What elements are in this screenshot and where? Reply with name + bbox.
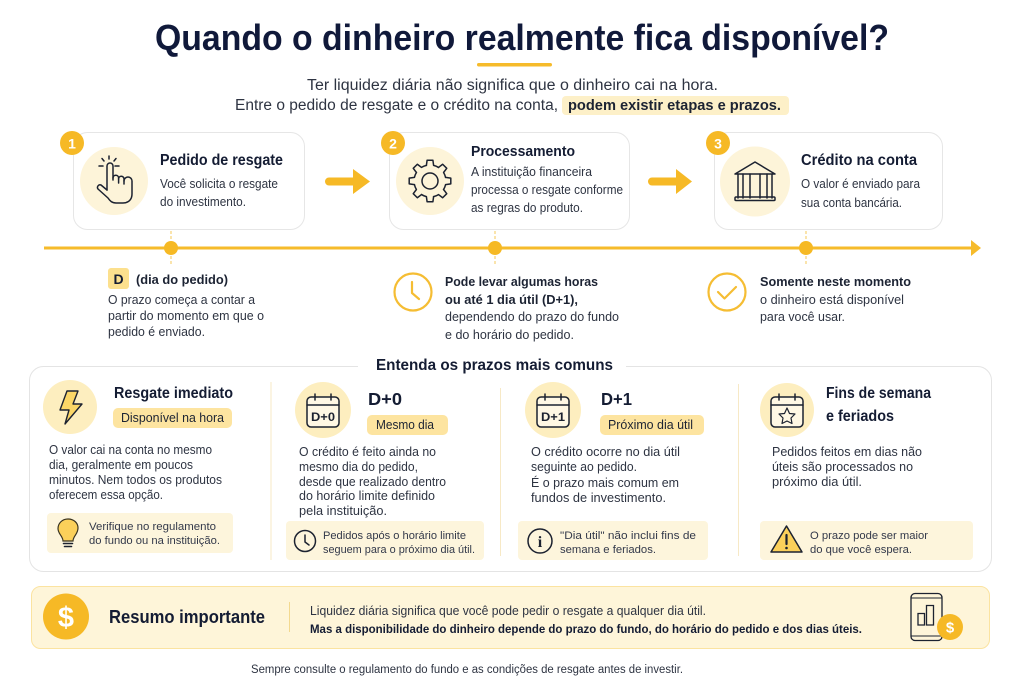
panel: resumo importante xyxy=(32,586,990,648)
text block: somente neste momento: Somente neste momento xyxy=(760,275,911,289)
column: D+1 xyxy=(518,382,708,560)
text block: pode levar algumas horas xyxy=(445,275,619,342)
text block: D dia do pedido: O prazo começa a contar a xyxy=(108,293,255,307)
icon: lightning xyxy=(60,391,82,424)
column: D+0: seguem para o próximo dia útil. xyxy=(323,544,475,556)
heading: entenda os prazos: Entenda os prazos mais comuns xyxy=(376,357,613,374)
panel: step 1 pedido de resgate: Você solicita o resgate xyxy=(160,177,278,191)
panel: step 3 credito na conta xyxy=(706,131,942,230)
icon: check circle xyxy=(708,274,746,310)
icon: light bulb xyxy=(58,519,78,546)
panel: step 1 pedido de resgate xyxy=(60,131,304,230)
icon: calendar D+1 xyxy=(537,394,569,427)
panel: step 3 credito na conta: Crédito na conta xyxy=(801,152,917,169)
panel: step 2 processamento: 2 xyxy=(389,136,397,152)
column: D+0: do horário limite definido xyxy=(299,489,435,503)
icon: calendar D+1: D+1 xyxy=(541,412,566,424)
column: resgate imediato: do fundo ou na instituição. xyxy=(89,535,220,547)
column: D+0: Mesmo dia xyxy=(376,418,434,432)
column: D+0: Pedidos após o horário limite xyxy=(323,530,466,542)
icon: calendar D+0 xyxy=(307,394,339,427)
arrow: step 1 to 2 xyxy=(325,169,370,194)
icon: dollar coin xyxy=(43,594,89,640)
column: resgate imediato: oferecem essa opção. xyxy=(49,488,163,502)
column: resgate imediato xyxy=(43,380,233,553)
icon: gear xyxy=(409,160,451,202)
subtitle xyxy=(235,77,789,115)
column: resgate imediato: Verifique no regulamento xyxy=(89,521,216,533)
panel: step 1 pedido de resgate: 1 xyxy=(68,136,76,152)
column: resgate imediato: minutos. Nem todos os produtos xyxy=(49,473,222,487)
column: resgate imediato: Disponível na hora xyxy=(121,411,224,425)
icon: clock outline xyxy=(394,274,432,310)
column: D+1: fundos de investimento. xyxy=(531,491,666,505)
column: D+0: O crédito é feito ainda no xyxy=(299,445,436,459)
text block: somente neste momento: para você usar. xyxy=(760,310,845,324)
icon: dollar coin: $ xyxy=(58,602,74,634)
column: D+1: Próximo dia útil xyxy=(608,418,693,432)
subtitle: podem existir etapas e prazos. xyxy=(568,97,781,114)
icon: warning triangle xyxy=(771,526,802,552)
panel: resumo importante: Resumo importante xyxy=(109,607,265,627)
icon: phone with coin: $ xyxy=(946,620,955,636)
footer note: Sempre consulte o regulamento do fundo e as condições de resgate antes de investir. xyxy=(251,664,683,676)
icon: phone with coin xyxy=(911,594,963,640)
panel: step 3 credito na conta: sua conta bancária. xyxy=(801,196,902,210)
text block: somente neste momento xyxy=(760,275,911,324)
column: D+1: semana e feriados. xyxy=(560,544,656,556)
icon: calendar star xyxy=(771,394,803,427)
text block: D dia do pedido: D xyxy=(113,271,124,287)
column: resgate imediato: O valor cai na conta no mesmo xyxy=(49,443,212,457)
column: D+0: desde que realizado dentro xyxy=(299,475,446,489)
panel: resumo importante: Liquidez diária significa que você pode pedir o resgate a qualquer dia útil. xyxy=(310,604,706,618)
panel: step 1 pedido de resgate: do investimento. xyxy=(160,195,246,209)
icon: info xyxy=(528,529,552,553)
column: fins de semana e feriados: e feriados xyxy=(826,408,894,425)
arrow: step 2 to 3 xyxy=(648,169,692,194)
text block: D dia do pedido: partir do momento em que o xyxy=(108,309,264,323)
panel: step 1 pedido de resgate: Pedido de resgate xyxy=(160,152,283,169)
subtitle: Entre o pedido de resgate e o crédito na conta, xyxy=(235,97,558,114)
column: D+1: O crédito ocorre no dia útil xyxy=(531,445,680,459)
column: fins de semana e feriados: O prazo pode ser maior xyxy=(810,530,928,542)
column: D+0: pela instituição. xyxy=(299,504,387,518)
text block: pode levar algumas horas: dependendo do prazo do fundo xyxy=(445,310,619,324)
title: Quando o dinheiro realmente fica disponível? xyxy=(155,17,889,58)
icon: small clock xyxy=(294,530,316,552)
icon: calendar D+0: D+0 xyxy=(311,412,335,424)
subtitle: Ter liquidez diária não significa que o dinheiro cai na hora. xyxy=(307,77,718,94)
text block: pode levar algumas horas: Pode levar algumas horas xyxy=(445,275,598,289)
text block: pode levar algumas horas: ou até 1 dia útil (D+1), xyxy=(445,293,578,307)
column: D+1: seguinte ao pedido. xyxy=(531,460,637,474)
column: fins de semana e feriados: Pedidos feitos em dias não xyxy=(772,445,922,459)
text block: D dia do pedido: (dia do pedido) xyxy=(136,273,228,287)
panel: step 3 credito na conta: 3 xyxy=(714,136,722,152)
column: fins de semana e feriados xyxy=(760,383,973,560)
panel: step 3 credito na conta: O valor é enviado para xyxy=(801,177,920,191)
text block: D dia do pedido xyxy=(108,268,264,339)
panel: step 2 processamento xyxy=(381,131,630,230)
column: resgate imediato: Resgate imediato xyxy=(114,385,233,402)
column: D+0: mesmo dia do pedido, xyxy=(299,460,418,474)
column: D+1: É o prazo mais comum em xyxy=(531,475,679,490)
panel: step 2 processamento: A instituição financeira xyxy=(471,165,592,179)
icon: bank xyxy=(735,162,775,200)
text block: somente neste momento: o dinheiro está disponível xyxy=(760,293,904,307)
panel: step 2 processamento: processa o resgate conforme xyxy=(471,183,623,197)
column: D+1: "Dia útil" não inclui fins de xyxy=(560,530,696,542)
column: fins de semana e feriados: próximo dia útil. xyxy=(772,475,862,489)
icon: info: i xyxy=(538,534,543,551)
column: fins de semana e feriados: úteis são processados no xyxy=(772,460,913,474)
column: D+0 xyxy=(286,382,484,560)
panel: step 2 processamento: Processamento xyxy=(471,143,575,160)
column: fins de semana e feriados: do que você espera. xyxy=(810,544,912,556)
column: fins de semana e feriados: Fins de semana xyxy=(826,385,931,402)
icon: tap hand xyxy=(97,156,132,203)
panel: step 2 processamento: as regras do produto. xyxy=(471,201,583,215)
column: D+1: D+1 xyxy=(601,389,632,409)
timeline xyxy=(44,231,981,266)
panel: prazos comuns xyxy=(30,357,992,572)
panel: resumo importante: Mas a disponibilidade do dinheiro depende do prazo do fundo, do horário do pedido e dos dias úteis. xyxy=(310,622,862,636)
text block: pode levar algumas horas: e do horário do pedido. xyxy=(445,328,574,342)
column: D+0: D+0 xyxy=(368,389,402,409)
column: resgate imediato: dia, geralmente em poucos xyxy=(49,458,193,472)
text block: D dia do pedido: pedido é enviado. xyxy=(108,325,205,339)
